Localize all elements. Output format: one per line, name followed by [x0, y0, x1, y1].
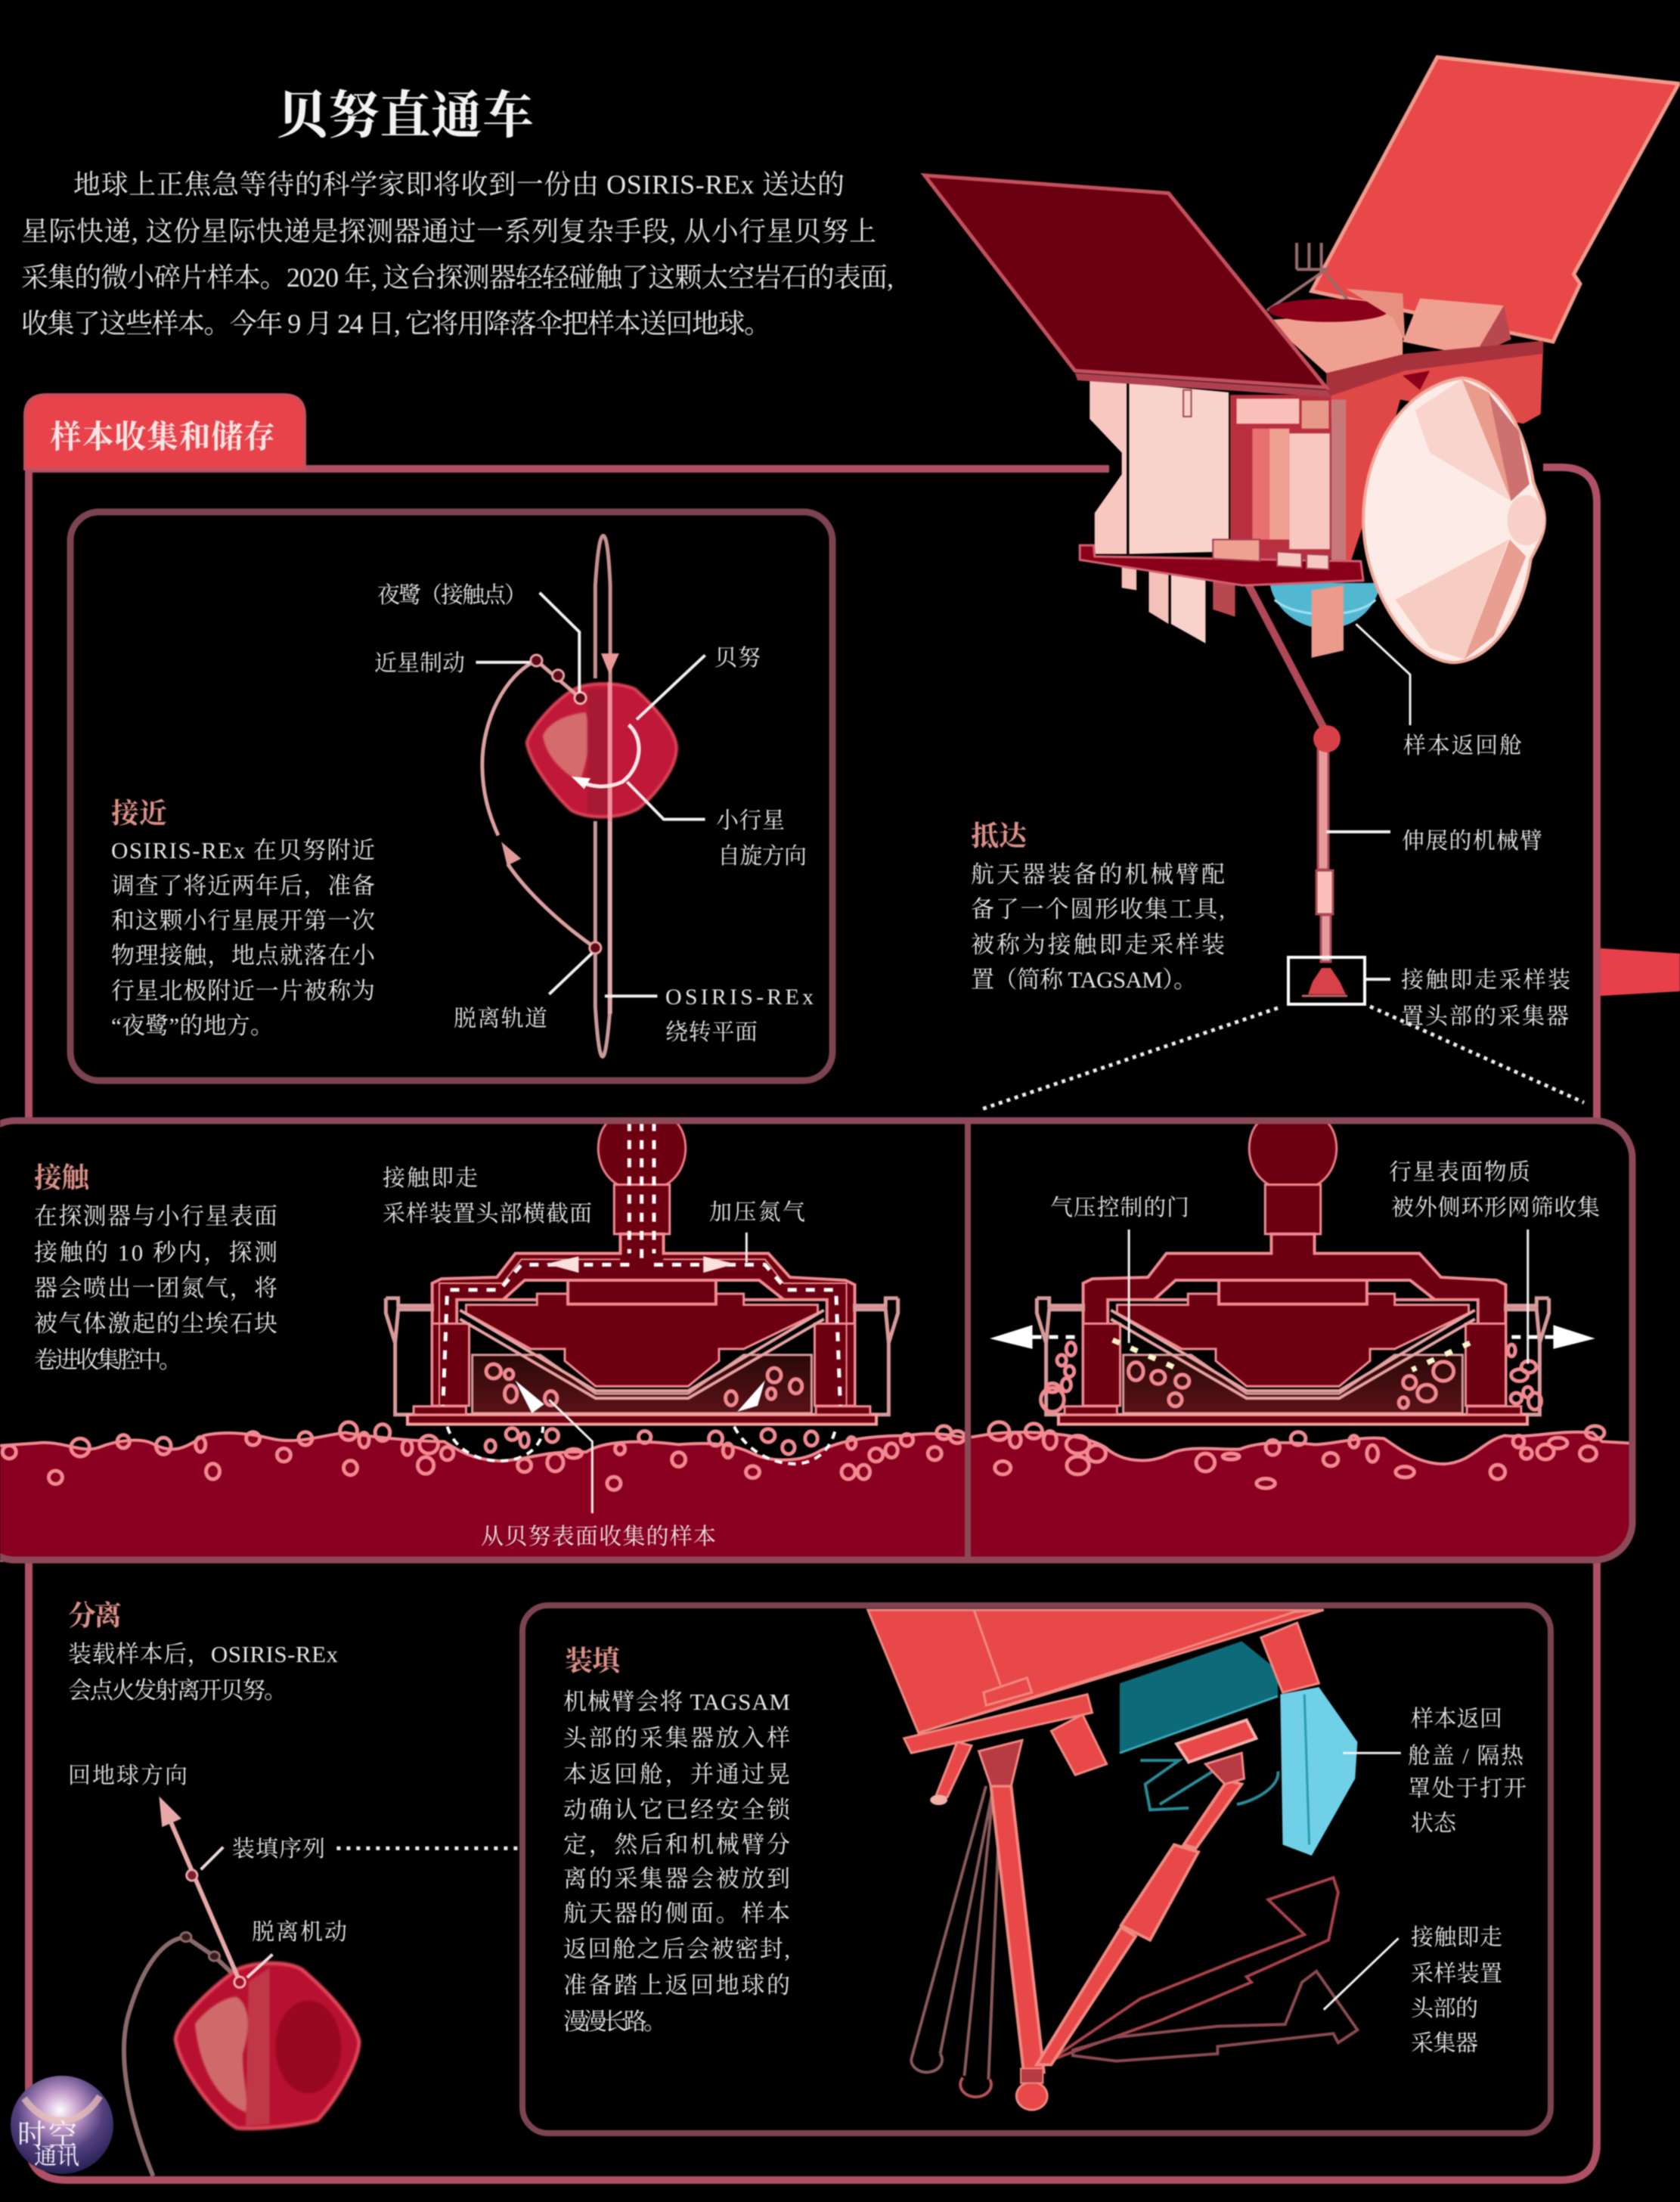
stowing text	[563, 1645, 791, 2035]
arm main	[991, 1786, 1044, 2072]
stowing labels: 舱盖 / 隔热	[1408, 1744, 1524, 1769]
diagram labels: 自旋方向	[718, 844, 807, 869]
contact text: 接触	[34, 1162, 91, 1194]
ghost arm positions	[911, 1786, 1000, 2079]
diagram labels: 脱离轨道	[454, 1006, 547, 1031]
contact text: 卷进收集腔中。	[34, 1347, 182, 1373]
departure diagram	[124, 1796, 519, 2176]
approach text: 行星北极附近一片被称为	[111, 978, 375, 1004]
contact text: 器会喷出一团氮气，将	[34, 1275, 277, 1301]
stowing text: 离的采集器会被放到	[563, 1865, 790, 1892]
stowing text: 漫漫长路。	[563, 2008, 667, 2035]
ground left	[0, 1432, 967, 1561]
stowing diagram	[868, 1610, 1401, 2110]
stowing text: 准备踏上返回地球的	[563, 1972, 790, 1999]
stowing labels: 罩处于打开	[1408, 1776, 1527, 1801]
stowing labels: 采样装置	[1411, 1962, 1502, 1986]
approach text: 调查了将近两年后，准备	[111, 873, 375, 899]
title: 贝努直通车	[277, 87, 534, 144]
diagram labels: 夜鹭（接触点）	[377, 583, 527, 608]
asteroid orbit diagram	[476, 535, 705, 1056]
watermark logo: 时空	[17, 2120, 77, 2151]
cross-section labels	[383, 1160, 1600, 1549]
stowing text: 本返回舱，并通过晃	[563, 1761, 790, 1788]
intro paragraph: 地球上正焦急等待的科学家即将收到一份由 OSIRIS-REx 送达的	[73, 169, 845, 200]
watermark logo: 通讯	[34, 2145, 79, 2169]
capsule lid	[1280, 1687, 1357, 1856]
departure text: 装载样本后，OSIRIS-REx	[68, 1641, 339, 1667]
departure labels	[68, 1763, 347, 1945]
intro paragraph	[21, 169, 894, 339]
cross-section labels: 行星表面物质	[1389, 1160, 1530, 1185]
diagram labels: 绕转平面	[665, 1020, 758, 1045]
arrival text	[971, 820, 1225, 993]
cross-section labels: 加压氮气	[709, 1200, 805, 1225]
solar panel right	[1312, 57, 1678, 342]
approach text: OSIRIS-REx 在贝努附近	[111, 837, 375, 864]
intro paragraph: 收集了这些样本。今年 9 月 24 日, 它将用降落伞把样本送回地球。	[21, 309, 771, 339]
spacecraft labels: 伸展的机械臂	[1402, 829, 1542, 854]
arrival text: 备了一个圆形收集工具,	[971, 896, 1225, 923]
stowing labels: 采集器	[1411, 2031, 1478, 2056]
capsule leader	[1356, 624, 1410, 725]
flow arrows and right debris	[950, 1230, 1629, 1488]
approach text	[111, 837, 376, 1039]
panel: touch and go	[0, 1121, 1632, 1561]
departure text: 会点火发射离开贝努。	[68, 1677, 287, 1704]
TAGSAM cross-section left	[386, 1122, 898, 1424]
cross-section labels: 被外侧环形网筛收集	[1391, 1196, 1600, 1220]
stowing labels: 接触即走	[1411, 1925, 1502, 1950]
cross-section labels: 采样装置头部横截面	[383, 1202, 592, 1227]
cross-section labels: 从贝努表面收集的样本	[481, 1524, 716, 1549]
departure text: 分离	[68, 1600, 122, 1632]
departure section	[68, 1600, 519, 2176]
diagram labels: OSIRIS-REx	[665, 985, 814, 1010]
arrival text: 置（简称 TAGSAM）。	[971, 966, 1197, 993]
contact text: 在探测器与小行星表面	[34, 1203, 277, 1230]
deck	[1080, 545, 1363, 585]
arm to collector	[1037, 1928, 1136, 2064]
arrival text: 抵达	[971, 820, 1028, 852]
approach text: 和这颗小行星展开第一次	[111, 907, 375, 934]
nitrogen flow and left debris	[2, 1122, 951, 1513]
section tab: 样本收集和储存	[50, 420, 275, 455]
diagram labels	[374, 583, 814, 1045]
dotted zoom lines	[979, 1006, 1584, 1110]
stowing text: 机械臂会将 TAGSAM	[563, 1689, 790, 1715]
spacecraft labels: 置头部的采集器	[1401, 1004, 1569, 1029]
spacecraft labels	[1326, 733, 1570, 1029]
section tab	[25, 395, 305, 469]
legs	[1122, 566, 1136, 591]
stowing text: 定，然后和机械臂分	[563, 1831, 790, 1858]
cross-section labels: 气压控制的门	[1050, 1196, 1189, 1220]
capsule	[1269, 583, 1381, 629]
approach text: “夜鹭”的地方。	[111, 1013, 274, 1039]
stowing text: 装填	[565, 1645, 624, 1677]
diagram labels: 近星制动	[374, 651, 465, 676]
red pointer wedge	[1601, 948, 1680, 996]
TAGSAM highlight box	[1288, 957, 1365, 1004]
arrival text: 航天器装备的机械臂配	[971, 861, 1225, 888]
ground right	[968, 1432, 1629, 1558]
dark solar panel	[925, 175, 1326, 388]
panel: stowing	[522, 1605, 1551, 2133]
stowing labels: 样本返回	[1411, 1707, 1502, 1732]
stowing labels	[1408, 1707, 1527, 2056]
extended robotic arm	[1248, 583, 1347, 996]
contact text: 被气体激起的尘埃石块	[34, 1310, 277, 1337]
contact text	[34, 1162, 277, 1373]
panel: approach	[70, 512, 832, 1081]
departure text	[68, 1600, 339, 1704]
diagram labels: 小行星	[716, 808, 785, 833]
section frame	[29, 467, 1597, 2180]
spacecraft labels: 接触即走采样装	[1401, 968, 1570, 993]
stowing text: 航天器的侧面。样本	[563, 1900, 790, 1927]
stowing labels: 头部的	[1411, 1996, 1478, 2021]
departure labels: 回地球方向	[68, 1763, 188, 1788]
contact text: 接触的 10 秒内，探测	[34, 1239, 277, 1266]
departure labels: 装填序列	[232, 1837, 325, 1862]
diagram labels: 贝努	[714, 646, 761, 671]
TAGSAM cross-section right	[1037, 1122, 1549, 1424]
body	[1090, 378, 1127, 554]
departure labels: 脱离机动	[252, 1920, 347, 1945]
spacecraft	[925, 57, 1678, 725]
arrival text: 被称为接触即走采样装	[971, 932, 1225, 958]
stowing text: 头部的采集器放入样	[563, 1725, 790, 1751]
cross-section labels: 接触即走	[383, 1166, 478, 1191]
watermark logo	[11, 2076, 113, 2174]
body underside	[868, 1610, 1324, 1733]
middle panel border	[0, 1121, 1632, 1560]
stowing text: 返回舱之后会被密封,	[563, 1936, 790, 1962]
stowing labels: 状态	[1411, 1811, 1457, 1836]
antenna dish	[1363, 378, 1545, 662]
spacecraft labels: 样本返回舱	[1403, 733, 1522, 758]
intro paragraph: 采集的微小碎片样本。2020 年, 这台探测器轻轻碰触了这颗太空岩石的表面,	[21, 262, 894, 293]
intro paragraph: 星际快递, 这份星际快递是探测器通过一系列复杂手段, 从小行星贝努上	[21, 216, 876, 247]
approach heading: 接近	[111, 798, 167, 830]
approach text: 物理接触，地点就落在小	[111, 942, 376, 969]
stowing text: 动确认它已经安全锁	[563, 1797, 791, 1823]
